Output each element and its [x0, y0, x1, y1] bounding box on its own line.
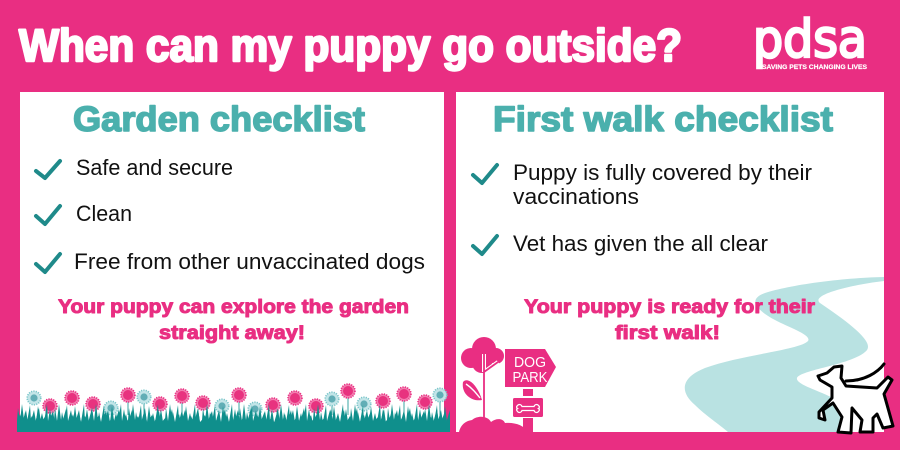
check item: fully covered by vaccinations: vaccinations	[513, 184, 639, 209]
callout: explore the garden: straight away!	[159, 322, 305, 344]
panel: first walk checklist	[456, 92, 893, 433]
title: When can my puppy go outside?	[19, 20, 682, 71]
logo: pdsa: SAVING PETS CHANGING LIVES	[762, 64, 867, 71]
callout: explore the garden: Your puppy can explore the garden	[58, 296, 409, 318]
heading: garden checklist: Garden checklist	[73, 100, 365, 139]
illustration: dog park sign and tree	[459, 337, 556, 432]
icon: dog on lead	[818, 364, 893, 433]
callout: ready for first walk	[524, 296, 815, 344]
check item: clean	[36, 201, 132, 226]
check item: clean: Clean	[76, 201, 132, 226]
check item: vet all clear: Vet has given the all clear	[513, 231, 768, 256]
panel: garden checklist	[20, 92, 444, 432]
logo: pdsa: pdsa	[753, 10, 867, 70]
callout: ready for first walk: first walk!	[615, 322, 720, 344]
callout: explore the garden	[58, 296, 409, 344]
grass and flowers	[17, 384, 450, 432]
check item: fully covered by vaccinations: Puppy is fully covered by their	[513, 160, 812, 185]
check item: fully covered by vaccinations	[473, 160, 812, 209]
check item: free from other unvaccinated dogs: Free from other unvaccinated dogs	[74, 249, 425, 274]
heading: first walk checklist: First walk checklist	[493, 100, 833, 139]
check item: safe and secure: Safe and secure	[76, 155, 233, 180]
illustration: dog park sign and tree: PARK	[512, 369, 548, 386]
illustration: winding path	[685, 277, 884, 432]
illustration: dog park sign and tree: DOG	[514, 354, 546, 371]
callout: ready for first walk: Your puppy is ready for their	[524, 296, 815, 318]
